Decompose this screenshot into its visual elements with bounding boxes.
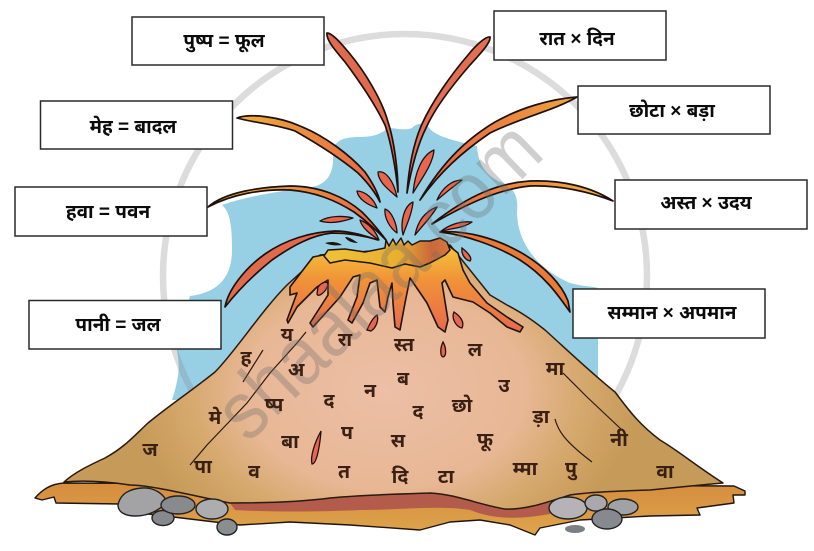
stream to रात bbox=[407, 37, 490, 193]
label: हवा = पवन bbox=[15, 187, 207, 236]
label: अस्त × उदय bbox=[615, 180, 807, 229]
letters on volcano: टा bbox=[438, 466, 455, 488]
letters on volcano: ब bbox=[397, 368, 410, 390]
letters on volcano: बा bbox=[281, 431, 300, 453]
stream lower left bbox=[225, 231, 378, 307]
spray droplets bbox=[378, 172, 397, 197]
letters on volcano: ह bbox=[240, 347, 252, 369]
ground red band bbox=[230, 493, 570, 518]
watermark circle bbox=[163, 34, 647, 518]
crater bbox=[324, 238, 450, 268]
label: सम्मान × अपमान bbox=[573, 289, 765, 338]
stream lower right bbox=[440, 232, 570, 312]
letters on volcano: न bbox=[364, 380, 377, 402]
label: हवा = पवन: हवा = पवन bbox=[66, 202, 150, 223]
label: पुष्प = फूल: पुष्प = फूल bbox=[183, 31, 266, 53]
letters on volcano: द bbox=[324, 390, 336, 412]
letters on volcano: म्मा bbox=[513, 458, 539, 480]
label: छोटा × बड़ा bbox=[578, 86, 770, 134]
letters on volcano: फू bbox=[477, 429, 494, 452]
letters on volcano: छो bbox=[452, 395, 474, 417]
letters on volcano bbox=[142, 324, 675, 488]
letters on volcano: व bbox=[248, 461, 261, 483]
lava drops on slope bbox=[312, 248, 471, 464]
letters on volcano: पु bbox=[565, 458, 578, 481]
label: पानी = जल: पानी = जल bbox=[75, 314, 162, 336]
letters on volcano: ष्प bbox=[265, 394, 284, 416]
rocks right bbox=[549, 495, 638, 533]
letters on volcano: वा bbox=[656, 461, 675, 483]
letters on volcano: ड़ा bbox=[532, 406, 551, 428]
label: पुष्प = फूल bbox=[132, 17, 324, 65]
label: रात × दिन bbox=[494, 11, 666, 60]
stream to हवा bbox=[208, 186, 386, 240]
stream to अस्त bbox=[432, 181, 613, 224]
watermark text: shaalaa.com bbox=[197, 103, 559, 457]
letters on volcano: नी bbox=[610, 429, 629, 451]
letters on volcano: ज bbox=[142, 439, 158, 461]
volcano body bbox=[35, 245, 745, 535]
ground cracks bbox=[190, 332, 622, 465]
letters on volcano: पा bbox=[194, 456, 213, 478]
letters on volcano: मा bbox=[546, 358, 565, 380]
letters on volcano: स्त bbox=[394, 334, 415, 356]
label: सम्मान × अपमान: सम्मान × अपमान bbox=[608, 303, 737, 324]
rocks left bbox=[118, 488, 237, 535]
letters on volcano: दि bbox=[392, 466, 409, 488]
erupting streams bbox=[208, 33, 613, 312]
label: मेह = बादल bbox=[40, 101, 232, 149]
stream to पुष्प bbox=[327, 33, 398, 192]
letters on volcano: मे bbox=[209, 406, 222, 429]
mountain bbox=[64, 245, 723, 509]
letters on volcano: अ bbox=[288, 359, 305, 381]
letters on volcano: रा bbox=[338, 329, 353, 351]
letters on volcano: प bbox=[341, 422, 354, 444]
letters on volcano: त bbox=[338, 461, 351, 483]
label: छोटा × बड़ा: छोटा × बड़ा bbox=[629, 100, 715, 122]
ground strip bbox=[35, 483, 745, 535]
letters on volcano: य bbox=[281, 324, 294, 346]
sky background bbox=[172, 124, 598, 400]
letters on volcano: स bbox=[391, 430, 406, 452]
letters on volcano: द bbox=[413, 401, 425, 423]
label: पानी = जल bbox=[29, 300, 221, 349]
label: मेह = बादल: मेह = बादल bbox=[90, 115, 177, 138]
label: रात × दिन: रात × दिन bbox=[539, 28, 615, 50]
stream to छोटा bbox=[420, 97, 577, 200]
stream to मेह bbox=[237, 116, 380, 202]
letters on volcano: ल bbox=[468, 339, 483, 361]
label: अस्त × उदय: अस्त × उदय bbox=[660, 193, 753, 214]
letters on volcano: उ bbox=[498, 375, 510, 397]
lava flows bbox=[287, 245, 523, 332]
